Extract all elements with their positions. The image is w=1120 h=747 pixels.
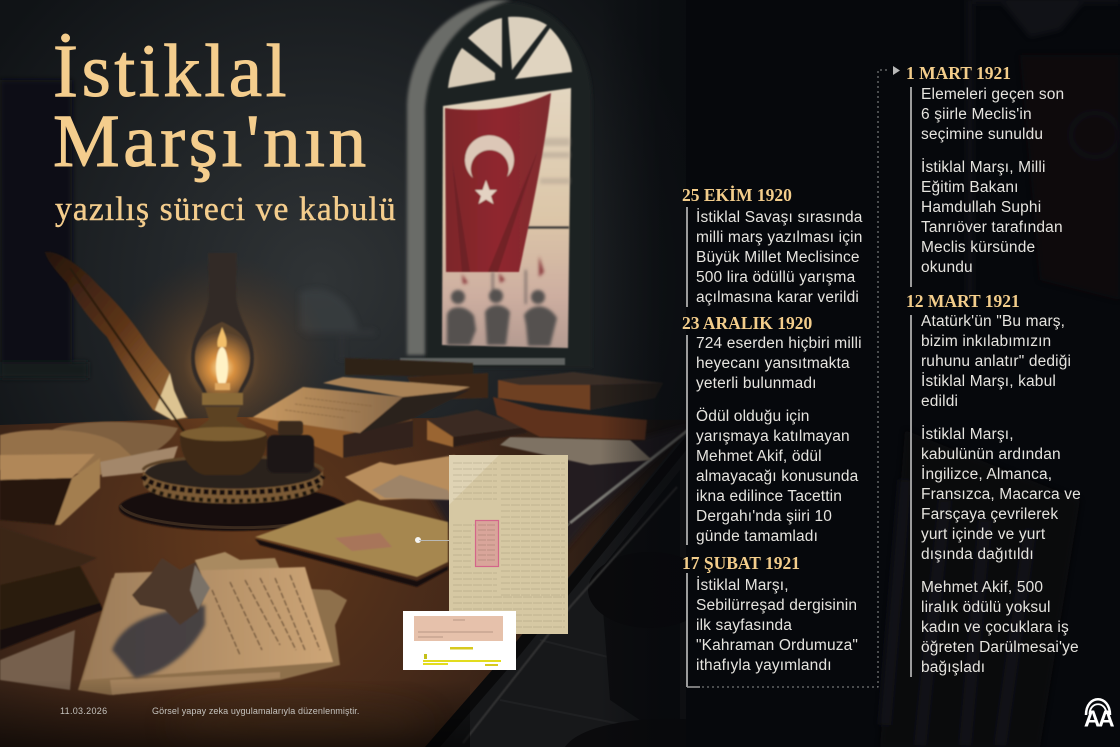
event: 23 Aralık 1920 [682,313,862,545]
event: 12 Mart 1921: İngilizce, Almanca, [921,466,1052,483]
event: 12 Mart 1921: kabulünün ardından [921,446,1061,463]
event: 12 Mart 1921: kadın ve çocuklara iş [921,619,1069,636]
event: 25 Ekim 1920: 500 lira ödüllü yarışma [696,269,855,286]
title: Marşı'nın [53,100,370,183]
event: 12 Mart 1921: dışında dağıtıldı [921,546,1034,563]
timeline left column [682,185,863,687]
chimney [191,253,254,393]
dark right side overlay [600,0,700,747]
newspaper page [449,455,568,634]
event: 23 Aralık 1920: 724 eserden hiçbiri milli [696,335,862,352]
lower panes [442,88,571,348]
event: 17 Şubat 1921: 17 ŞUBAT 1921 [682,553,800,573]
event: 1 Mart 1921: okundu [921,259,973,276]
event: 17 Şubat 1921 [682,553,858,687]
event: 12 Mart 1921: bizim inkılabımızın [921,333,1051,350]
event: 23 Aralık 1920: Ödül olduğu için [696,408,810,425]
handwritten letter pile [0,552,347,695]
event: 12 Mart 1921: bağışladı [921,659,985,676]
footer date: 11.03.2026 [60,706,107,716]
event: 12 Mart 1921: İstiklal Marşı, [921,426,1014,443]
event: 12 Mart 1921: yurt içinde ve yurt [921,526,1045,543]
event: 1 Mart 1921: Hamdullah Suphi [921,199,1041,216]
event: 12 Mart 1921: liralık ödülü yoksul [921,599,1051,616]
event: 1 Mart 1921: Elemeleri geçen son [921,86,1064,103]
ghost window upper right [970,0,1120,300]
open book stack centre [247,358,488,458]
event: 1 Mart 1921 [906,63,1064,287]
burner collar [202,393,243,405]
event: 17 Şubat 1921: "Kahraman Ordumuza" [696,637,858,654]
desk front edge [425,423,705,747]
newspaper document with connector [415,455,568,634]
event: 25 Ekim 1920: milli marş yazılması için [696,229,863,246]
event: 1 Mart 1921: İstiklal Marşı, Milli [921,159,1046,176]
connector dot [415,537,421,543]
event: 25 Ekim 1920 [682,185,863,307]
event: 23 Aralık 1920: almayacağı konusunda [696,468,858,485]
arch panes [448,48,495,88]
envelope [255,500,448,587]
event: 23 Aralık 1920: yeterli bulunmadı [696,375,817,392]
book stack right [493,372,663,440]
ink bottle [267,421,314,473]
wall [0,0,720,470]
event: 12 Mart 1921: öğreten Darülmesai'ye [921,639,1079,656]
event: 12 Mart 1921: Farsçaya çevrilerek [921,506,1058,523]
vignette bottom [0,680,470,747]
open book on the left [0,422,178,477]
event: 12 Mart 1921: İstiklal Marşı, kabul [921,373,1056,390]
event: 12 Mart 1921: ruhunu anlatır" dediği [921,353,1071,370]
event: 23 Aralık 1920: 23 ARALIK 1920 [682,313,812,333]
footer note: Görsel yapay zeka uygulamalarıyla düzenlenmiştir. [152,706,360,716]
event: 1 Mart 1921: Meclis kürsünde [921,239,1035,256]
floor and dark side of desk [430,420,720,747]
event: 17 Şubat 1921: ithafıyla yayımlandı [696,657,832,674]
lamp glow [112,255,332,475]
event: 23 Aralık 1920: Dergahı'nda şiiri 10 [696,508,832,525]
event: 23 Aralık 1920: yarışmaya katılmayan [696,428,850,445]
event: 12 Mart 1921: Fransızca, Macarca ve [921,486,1081,503]
event: 12 Mart 1921: 12 MART 1921 [906,291,1020,311]
event: 25 Ekim 1920: İstiklal Savaşı sırasında [696,209,863,226]
closed book left [0,454,100,525]
official record document [403,611,516,670]
scattered papers right of the lamp [345,437,652,500]
arched window [400,0,592,368]
desk mat rim [120,505,350,528]
timeline right column [906,63,1081,677]
globe on wall shelf [300,289,375,360]
event: 17 Şubat 1921: İstiklal Marşı, [696,577,789,594]
event: 17 Şubat 1921: ilk sayfasında [696,617,792,634]
feather quill [45,252,218,480]
event: 23 Aralık 1920: heyecanı yansıtmakta [696,355,850,372]
closed book mid [427,410,527,447]
event: 1 Mart 1921: Eğitim Bakanı [921,179,1019,196]
event: 1 Mart 1921: 1 MART 1921 [906,63,1011,83]
oil lamp [119,253,347,531]
window sill [400,358,565,365]
event: 23 Aralık 1920: günde tamamladı [696,528,818,545]
event: 25 Ekim 1920: açılmasına karar verildi [696,289,859,306]
title [53,30,370,183]
timeline dotted connector with arrow [687,66,900,688]
event: 1 Mart 1921: Tanrıöver tarafından [921,219,1063,236]
soldiers silhouettes [447,256,557,346]
bowl [180,428,267,475]
tray [145,455,321,493]
event: 25 Ekim 1920: Büyük Millet Meclisince [696,249,860,266]
event: 23 Aralık 1920: ikna edilince Tacettin [696,488,842,505]
event: 25 Ekim 1920: 25 EKİM 1920 [682,185,792,205]
left dark window [0,80,88,378]
ghost chair lower right [880,430,1080,747]
event: 1 Mart 1921: 6 şiirle Meclis'in [921,106,1032,123]
subtitle: yazılış süreci ve kabulü [55,191,397,228]
event: 12 Mart 1921: Atatürk'ün "Bu marş, [921,313,1065,330]
crumpled paper [132,558,208,625]
event: 23 Aralık 1920: Mehmet Akif, ödül [696,448,822,465]
bottom-left book [0,527,103,650]
event: 1 Mart 1921: seçimine sunuldu [921,126,1043,143]
Turkish flag [445,93,551,272]
event: 12 Mart 1921: Mehmet Akif, 500 [921,579,1043,596]
event: 12 Mart 1921 [906,291,1081,677]
shadow of the crumpled paper [112,605,205,678]
event: 12 Mart 1921: edildi [921,393,958,410]
title: İstiklal [53,30,290,113]
desk top [0,417,696,747]
event: 17 Şubat 1921: Sebilürreşad dergisinin [696,597,857,614]
